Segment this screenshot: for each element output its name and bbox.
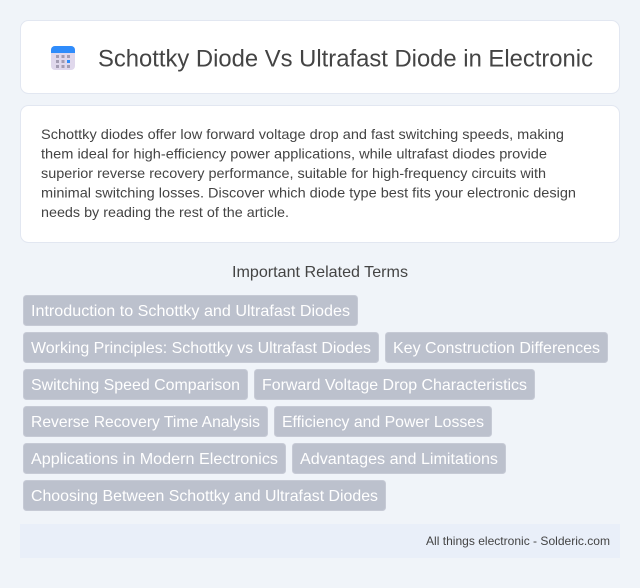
tag: introduction [24, 296, 358, 326]
tag: forward voltage [254, 370, 534, 400]
icon: calendar grid [51, 46, 75, 70]
panel: introduction text [20, 106, 620, 242]
tag: forward voltage: Forward Voltage Drop Characteristics [262, 377, 527, 394]
tag list: related terms [24, 296, 608, 510]
tag: working principles: Working Principles: Schottky vs Ultrafast Diodes [31, 340, 371, 357]
tag: choosing [24, 480, 386, 510]
tag: applications [24, 444, 286, 474]
panel: title card [20, 20, 620, 94]
text block: introduction paragraph [41, 126, 576, 220]
tag: introduction: Introduction to Schottky and Ultrafast Diodes [31, 303, 350, 320]
tag: construction [386, 332, 608, 362]
tag: advantages [292, 444, 506, 474]
tag: efficiency [274, 406, 492, 436]
tag: working principles [24, 332, 378, 362]
tag: switching speed [24, 370, 248, 400]
text block: introduction paragraph: minimal switching losses. Discover which diode type best fits your electronic design [41, 184, 576, 200]
footer [20, 524, 620, 558]
footer: All things electronic - Solderic.com [426, 534, 610, 548]
text block: introduction paragraph: needs by reading the rest of the article. [41, 204, 289, 220]
tag: switching speed: Switching Speed Comparison [31, 377, 240, 394]
text block: introduction paragraph: Schottky diodes offer low forward voltage drop and fast switching speeds, making [41, 126, 564, 142]
text block: introduction paragraph: them ideal for high-efficiency power applications, while ultrafast diodes provide [41, 146, 547, 162]
tag: efficiency: Efficiency and Power Losses [282, 414, 484, 431]
tag: construction: Key Construction Differences [393, 340, 600, 357]
tag: choosing: Choosing Between Schottky and Ultrafast Diodes [31, 488, 378, 505]
heading: important related terms: Important Related Terms [232, 264, 408, 281]
tag: applications: Applications in Modern Electronics [31, 451, 278, 468]
tag: advantages: Advantages and Limitations [300, 451, 498, 468]
title: Schottky Diode Vs Ultrafast Diode in Electronic [98, 46, 593, 72]
tag: reverse recovery [24, 406, 268, 436]
tag: reverse recovery: Reverse Recovery Time Analysis [31, 414, 260, 431]
text block: introduction paragraph: superior reverse recovery performance, suitable for high-frequency circuits with [41, 165, 546, 181]
